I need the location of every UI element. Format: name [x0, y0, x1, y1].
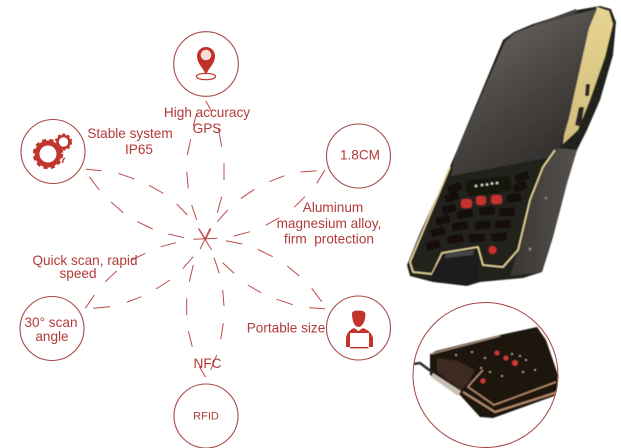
- label: NFC: NFC: [194, 356, 222, 371]
- product photo: rugged handheld: [407, 6, 616, 286]
- label: Stable system IP65: Stable system: [87, 126, 173, 141]
- label: High accuracy GPS: GPS: [193, 121, 221, 136]
- icon: map pin: [196, 47, 216, 80]
- circle: RFID: [174, 384, 238, 448]
- gold face outline: [410, 150, 555, 274]
- label: Portable size: Portable size: [247, 320, 325, 336]
- circle: 1.8CM: [326, 124, 390, 188]
- phone body: [407, 6, 616, 286]
- gold frame: [563, 7, 613, 144]
- icon: gears: [34, 135, 71, 168]
- label: Stable system IP65: IP65: [125, 142, 153, 157]
- red function keys: [461, 195, 502, 254]
- keypad bar: [465, 175, 512, 197]
- side buttons: [585, 84, 590, 96]
- bottom connector: [432, 249, 479, 285]
- circle: GPS location: [174, 32, 238, 96]
- keypad keys: [425, 171, 530, 251]
- circle: 30 degree scan angle: [20, 296, 84, 360]
- close-up device: [413, 327, 558, 418]
- top clip: [533, 9, 577, 29]
- circle: 30 degree scan angle: angle: [35, 329, 69, 344]
- side screws: [544, 196, 548, 200]
- lower side panel: [510, 148, 577, 276]
- dashed radial petal lines: [85, 101, 325, 377]
- circle: 1.8CM: 1.8CM: [340, 148, 380, 162]
- keypad dots: [475, 182, 498, 187]
- circle: RFID: RFID: [193, 410, 219, 422]
- circle: portable size: [326, 296, 390, 360]
- label: Aluminum magnesium alloy: firm protection: [284, 232, 374, 246]
- label: Aluminum magnesium alloy: Aluminum: [303, 200, 363, 215]
- inset circle: device close-up: [413, 302, 558, 448]
- label: Quick scan, rapid speed: speed: [59, 266, 97, 281]
- label: Quick scan, rapid speed: Quick scan, rapid: [32, 253, 138, 268]
- circle: stable system: [21, 120, 85, 184]
- label: High accuracy GPS: High accuracy: [164, 105, 250, 120]
- label: Aluminum magnesium alloy: magnesium alloy,: [277, 216, 381, 231]
- icon: person with laptop: [346, 310, 373, 348]
- screen: [451, 9, 597, 176]
- circle: 30 degree scan angle: 30° scan: [24, 315, 78, 330]
